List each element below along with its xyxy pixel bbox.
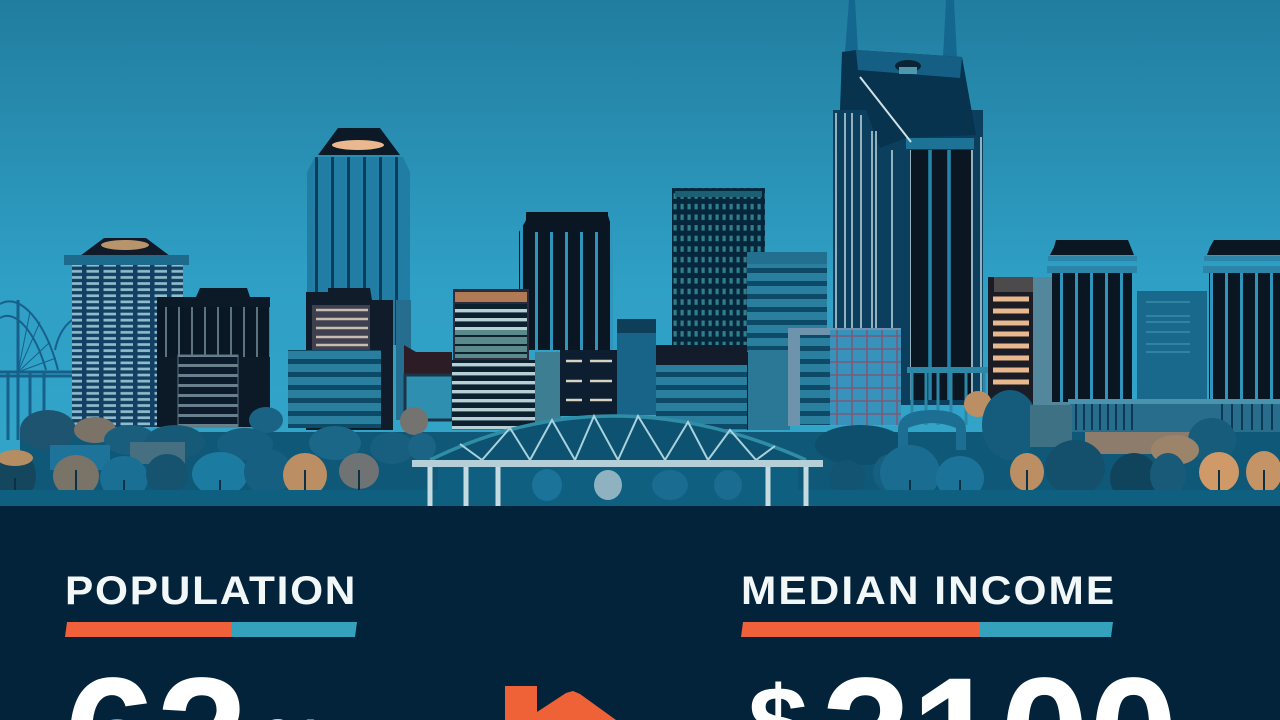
- building: teal louvred tower: [747, 252, 827, 430]
- population heading: POPULATION: [65, 568, 355, 613]
- building: glass grid block: [788, 328, 901, 426]
- icon: orange house: [505, 686, 616, 720]
- tree line and ground: [0, 390, 1280, 506]
- building: teal striped block: [288, 350, 381, 428]
- building: tall blue tower with dome: [307, 128, 410, 345]
- bottom statistics panel: [0, 506, 1280, 720]
- building: low dark block with light bands: [306, 288, 411, 430]
- population bar: [65, 622, 357, 637]
- building: twin black tower, centre right: [1047, 240, 1207, 402]
- landmark tower with twin spires: [833, 0, 991, 425]
- building: striped mid-rise: [452, 289, 535, 430]
- small central buildings: [535, 319, 656, 422]
- arched bridge, far left: [0, 300, 76, 440]
- building: dark block with louvres: [157, 288, 270, 427]
- building: striped teal block front: [656, 345, 748, 430]
- building: black tower, far right: [1203, 240, 1280, 432]
- connector block behind central buildings: [404, 345, 453, 420]
- building: dark windowed tower: [672, 188, 765, 348]
- building: black tower with blue stripes: [519, 212, 613, 350]
- median income bar: [741, 622, 1113, 637]
- back row of trees: [20, 390, 1280, 492]
- building: round-capped windowed tower: [64, 238, 189, 427]
- central truss bridge: [412, 416, 823, 507]
- median income heading: MEDIAN INCOME: [741, 568, 1114, 613]
- podium terrace between right towers: [1068, 399, 1280, 432]
- front row of trees: [0, 440, 1280, 503]
- sky background: [0, 0, 1280, 506]
- building: tan-banded block: [988, 277, 1070, 407]
